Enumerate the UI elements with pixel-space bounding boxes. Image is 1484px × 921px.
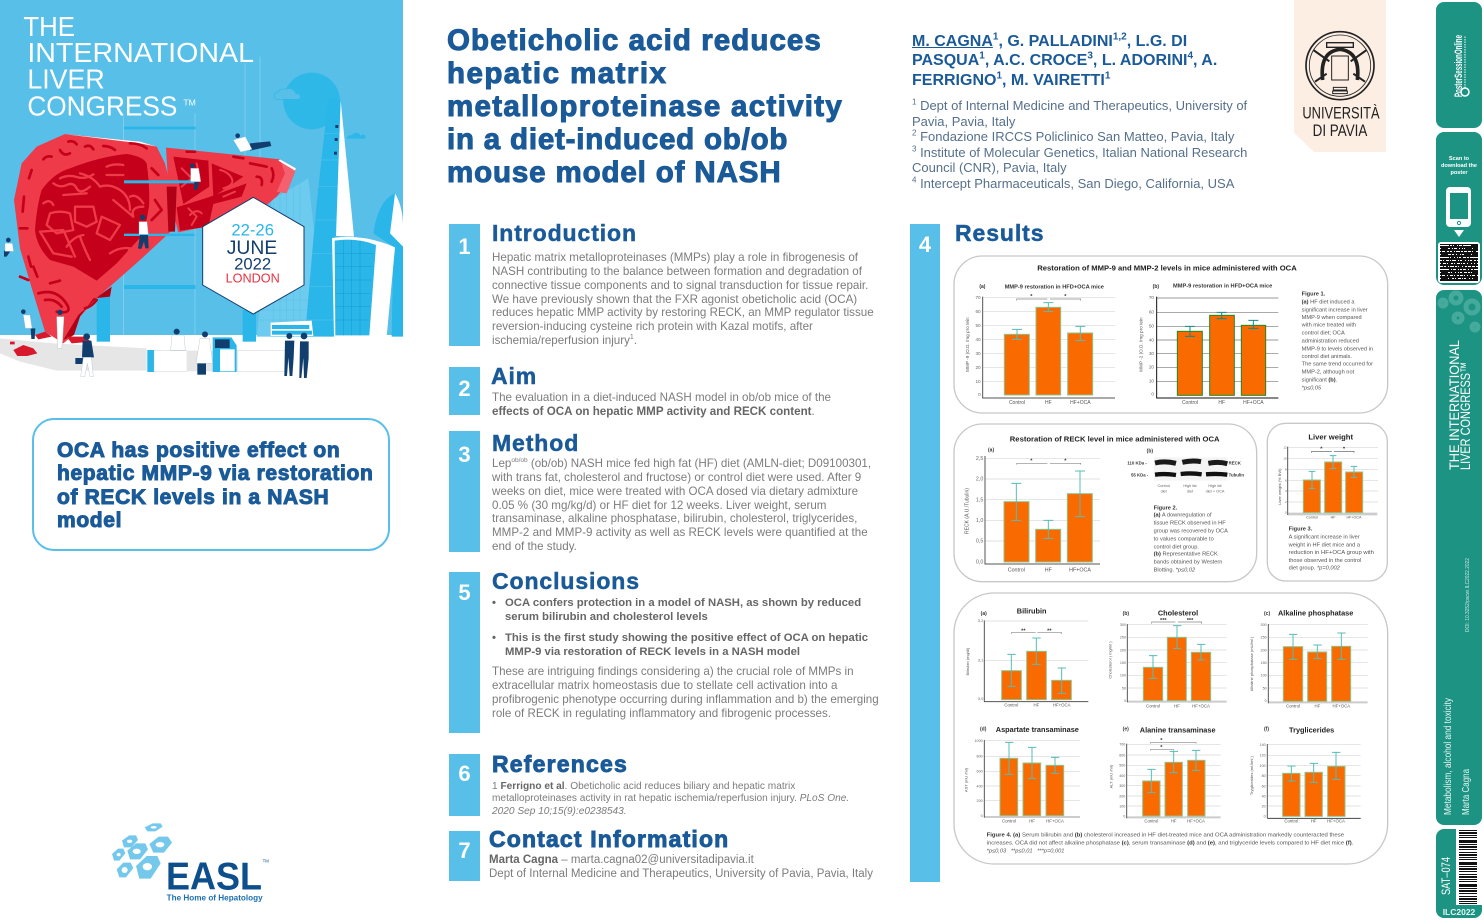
chart: MMP-2 bars: 10 — [1149, 379, 1154, 384]
chart: RECK bars: HF — [1045, 568, 1053, 574]
chart: RECK bars: 1,0 — [976, 518, 983, 524]
chart: triglycerides: 100 — [1260, 764, 1266, 768]
text: contact: Marta Cagna – marta.cagna02@universitadipavia.it Dept of Internal Medicine and Therapeutics, University of Pavia, Pavia, Italy — [489, 854, 873, 880]
chart: liver weight bars: 2 — [1285, 500, 1287, 504]
congress name: LIVER — [27, 64, 105, 95]
chart: liver weight bars: 8 — [1285, 468, 1287, 472]
section number 2: 2 — [458, 376, 471, 401]
chart: RECK bars: 1,5 — [976, 497, 983, 503]
text: method: Lepob/ob (ob/ob) NASH mice fed high fat (HF) diet (AMLN-diet; D09100301, with trans fat, cholesterol and fructose) or control diet were used. After 9 weeks on diet, mice were treated with OCA dosed via dietary admixture 0.05 % (30 mg/kg/d) or HF diet for 12 weeks. Liver weight, serum transaminase, alkaline phosphatase, bilirubin, cholesterol, triglycerides, MMP-2 and MMP-9 activity as well as RECK levels were quantified at the end of the study. — [492, 457, 871, 553]
chart: liver weight bars: 6 — [1285, 478, 1287, 482]
caption: figure 1: (a) HF diet induced a — [1302, 300, 1355, 306]
chart: MMP-9 bars: (a) — [979, 284, 986, 290]
sidebar block: scan to download poster — [1436, 132, 1482, 285]
chart: bilirubin: HF+OCA — [1053, 703, 1071, 708]
panel: congress banner illustration — [0, 0, 403, 378]
chart: MMP-2 bars: 30 — [1149, 351, 1154, 356]
text: reference: 1 Ferrigno et al. Obeticholic acid reduces biliary and hepatic matrix metalloproteinases activity in rat hepatic ischemia/reperfusion injury. PLoS One. 2020 Sep 10;15(9):e0238543. — [492, 781, 849, 817]
image: Western blot: High fat — [1183, 484, 1198, 488]
chart: MMP-2 bars: 0 — [1151, 392, 1154, 397]
chart: cholesterol: *** — [1160, 618, 1167, 624]
chart: triglycerides: Tryglicerides — [1289, 726, 1334, 735]
caption: figure 1: administration reduced — [1302, 338, 1359, 344]
sidebar block: poster number and barcode: ILC2022 — [1443, 907, 1476, 917]
chart: MMP-9 bars: MMP-9 restoration in HFD+OCA mice — [1005, 285, 1104, 291]
chart: alkaline phosphatase: 150 — [1261, 661, 1267, 665]
chart: triglycerides: 40 — [1262, 794, 1266, 798]
chart: MMP-9 bars: 70 — [975, 295, 981, 300]
caption: figure 3 — [1288, 527, 1374, 572]
caption: figure 1: significant (b). — [1302, 377, 1338, 383]
chart: alkaline phosphatase: 200 — [1261, 648, 1267, 652]
chart: alkaline phosphatase: Control — [1286, 704, 1300, 709]
chart: MMP-2 bars: MMP-9 restoration in HFD+OCA mice — [1173, 283, 1272, 289]
congress name: THE — [23, 11, 75, 42]
chart: alkaline phosphatase: 100 — [1261, 674, 1267, 678]
chart: aspartate transaminase: 200 — [977, 799, 983, 803]
affiliations: 1 Dept of Internal Medicine and Therapeutics, University of Pavia, Pavia, Italy 2 Fondazione IRCCS Policlinico San Matteo, Pavia, Italy 3 Institute of Molecular Genetics, Italian National Research Council (CNR), Pavia, Italy 4 Intercept Pharmaceuticals, San Diego, California, USA — [912, 98, 1247, 191]
chart: triglycerides: 60 — [1262, 784, 1266, 788]
chart: RECK bars: * — [1030, 459, 1033, 465]
date hexagon: JUNE — [227, 238, 277, 259]
chart: bilirubin: Control — [1004, 703, 1018, 708]
chart: triglycerides: 80 — [1262, 774, 1266, 778]
section number 1 — [449, 224, 480, 346]
chart: RECK bars — [964, 448, 1100, 574]
sidebar block: scan to download poster: Scan to — [1449, 156, 1470, 162]
chart: triglycerides — [1249, 726, 1361, 824]
section number 4: 4 — [919, 232, 931, 257]
panel: serum biochemistry — [953, 592, 1388, 865]
image: Western blot: (b) — [1147, 449, 1153, 455]
authors: M. CAGNA1, G. PALLADINI1,2, L.G. DI PASQUA1, A.C. CROCE3, L. ADORINI4, A. FERRIGNO1, M. VAIRETTI1 — [912, 32, 1217, 89]
chart: RECK bars: * — [1064, 459, 1067, 465]
chart: cholesterol: Cholesterol — [1158, 609, 1198, 618]
caption: figure 2: group was recovered by OCA — [1154, 529, 1228, 535]
chart: aspartate transaminase: HF — [1029, 819, 1035, 824]
sidebar block: scan to download poster: poster — [1450, 170, 1468, 176]
chart: bilirubin: HF — [1033, 703, 1040, 708]
heading: Contact Information: Contact Information — [489, 826, 729, 852]
heading: Aim: Aim — [491, 363, 537, 389]
text: conclusions bullets: This is the first study showing the positive effect of OCA on hepatic MMP-9 via restoration of RECK levels in a NASH model — [505, 632, 868, 658]
text: aim: The evaluation in a diet-induced NASH model in ob/ob mice of the effects of OCA on hepatic MMP activity and RECK content. — [492, 391, 831, 418]
congress name: TM — [183, 97, 196, 107]
caption: figure 1: significant increase in liver — [1302, 307, 1368, 313]
caption: figure 4 — [987, 833, 1354, 855]
chart: liver weight bars: HF+OCA — [1347, 516, 1362, 520]
chart: alanine transaminase: 600 — [1119, 753, 1125, 757]
chart: MMP-9 bars: MMP -9 (O.D. /mg pro tein — [965, 317, 970, 372]
section number 4 — [910, 224, 940, 882]
heading: Conclusions: Conclusions — [492, 568, 640, 594]
sidebar block: congress and session: THE INTERNATIONAL — [1446, 340, 1462, 470]
chart: cholesterol: (b) — [1123, 611, 1129, 617]
chart: bilirubin: 3,2 — [978, 618, 984, 623]
chart: cholesterol: 100 — [1120, 674, 1126, 678]
chart: alanine transaminase: Control — [1144, 819, 1158, 824]
chart: triglycerides: Tryglicerides (mU/ml ) — [1249, 756, 1254, 795]
chart: cholesterol: Cholesterol ( mg/ml ) — [1107, 641, 1112, 679]
chart: aspartate transaminase: Aspartate transaminase — [996, 725, 1079, 734]
sidebar block: congress and session: LIVER CONGRESS™ — [1457, 362, 1473, 470]
date hexagon: 2022 — [234, 254, 271, 273]
chart: triglycerides: HF+OCA — [1327, 819, 1345, 824]
chart: alkaline phosphatase: 250 — [1261, 636, 1267, 640]
caption: figure 2: (a) A downregulation of — [1154, 513, 1212, 519]
icon: London skyline — [97, 73, 403, 342]
chart: alanine transaminase: 500 — [1119, 764, 1125, 768]
caption: figure 2: (b) Representative RECK — [1154, 552, 1218, 558]
chart: MMP-9 bars: 10 — [975, 379, 981, 384]
caption: figure 1: MMP-9 when compared — [1302, 315, 1362, 321]
chart: MMP-9 bars: 20 — [975, 365, 981, 370]
panel: RECK restoration: Restoration of RECK level in mice administered with OCA — [1010, 435, 1220, 444]
image: Western blot: Control — [1157, 484, 1170, 488]
panel: MMP restoration — [953, 255, 1388, 414]
panel: liver weight: Liver weight — [1308, 433, 1353, 442]
text: conclusions bullets: OCA confers protection in a model of NASH, as shown by reduced serum bilirubin and cholesterol levels — [505, 597, 861, 623]
chart: alanine transaminase: * — [1160, 745, 1163, 751]
chart: alanine transaminase: Alanine transaminase — [1140, 726, 1216, 735]
chart: bilirubin: Bilirubin — [1017, 607, 1047, 616]
caption: figure 3: reduction in HF+OCA group with — [1289, 550, 1374, 556]
logo: Università di Pavia — [1294, 0, 1386, 152]
caption: figure 1: MMP-2, although not — [1302, 370, 1355, 376]
caption: figure 3: A significant increase in liver — [1289, 535, 1360, 541]
chart: cholesterol: 50 — [1122, 686, 1126, 690]
icon: lab bench and scientists — [4, 133, 309, 378]
chart: MMP-9 bars: HF+OCA — [1070, 400, 1091, 406]
chart: cholesterol: 150 — [1120, 661, 1126, 665]
chart: MMP-2 bars: (b) — [1153, 284, 1159, 290]
icon: EASL logo: The Home of Hepatology — [167, 894, 263, 903]
sidebar block: congress and session: DOI: 10.3252/pscwi.ILC2022.2022 — [1465, 558, 1471, 632]
chart: aspartate transaminase — [963, 725, 1080, 824]
chart: alkaline phosphatase: 50 — [1263, 686, 1267, 690]
chart: MMP-2 bars — [1138, 283, 1278, 406]
caption: figure 2: tissue RECK observed in HF — [1154, 521, 1226, 527]
caption: figure 2 — [1154, 506, 1228, 574]
chart: aspartate transaminase: Control — [1002, 819, 1016, 824]
sidebar block: scan to download poster: download the — [1441, 163, 1477, 169]
chart: alanine transaminase: HF+OCA — [1187, 819, 1205, 824]
chart: liver weight bars: Control — [1306, 516, 1318, 520]
image: Western blot: 110 KDa - — [1127, 461, 1147, 466]
chart: MMP-2 bars: Control — [1182, 400, 1198, 406]
chart: aspartate transaminase: 800 — [977, 755, 983, 759]
chart: cholesterol: 200 — [1120, 648, 1126, 652]
chart: triglycerides: 0 — [1264, 815, 1266, 819]
image: Western blot: Tubulin — [1229, 472, 1244, 477]
caption: figure 1: control diet; OCA — [1302, 331, 1345, 337]
caption: figure 3: those observed in the control — [1289, 558, 1361, 564]
heading: Results: Results — [955, 220, 1044, 246]
text: conclusions bullets — [492, 597, 868, 658]
caption: figure 1: control diet animals. — [1302, 354, 1352, 360]
chart: alkaline phosphatase: (c) — [1264, 611, 1270, 617]
chart: MMP-9 bars: 0 — [978, 392, 981, 397]
text: introduction: Hepatic matrix metalloproteinases (MMPs) play a role in fibrogenesis of NASH contributing to the balance between formation and degradation of connective tissue components and to signal transduction for tissue repair. We have previously shown that the FXR agonist obeticholic acid (OCA) reduces hepatic MMP activity by restoring RECK, an MMP regulator tissue reversion-inducing cysteine rich protein with Kazal motifs, after ischemia/reperfusion injury1. — [492, 251, 874, 347]
chart: bilirubin: ** — [1021, 628, 1026, 634]
chart: RECK bars: 0,0 — [976, 559, 983, 565]
caption: figure 1: Figure 1. — [1302, 292, 1326, 298]
chart: cholesterol: 250 — [1120, 636, 1126, 640]
section number 1: 1 — [458, 234, 471, 259]
chart: RECK bars: (a) — [988, 448, 994, 454]
icon: liver — [10, 134, 296, 356]
caption: figure 4: Figure 4. (a) Serum bilirubin and (b) cholesterol increased in HF diet-treated mice and OCA administration markedly counteracted these — [987, 833, 1344, 839]
chart: RECK bars: Control — [1008, 568, 1025, 574]
chart: alkaline phosphatase: Alkaline phosphatase (mU/ml ) — [1249, 636, 1254, 691]
chart: alkaline phosphatase: 300 — [1261, 623, 1267, 627]
heading: References: References — [492, 751, 628, 777]
chart: aspartate transaminase: 1000 — [975, 739, 983, 743]
panel: sidebar — [1436, 2, 1482, 918]
section number 5 — [449, 572, 480, 733]
date hexagon: 22-26 — [231, 220, 274, 239]
chart: liver weight bars: HF — [1331, 516, 1336, 520]
chart: liver weight bars: * — [1343, 447, 1346, 453]
icon: EASL logo — [112, 823, 269, 903]
chart: MMP-2 bars: MMP -2 (O.D. /mg pro tein — [1138, 317, 1143, 372]
chart: alanine transaminase: 100 — [1119, 804, 1125, 808]
text: conclusions bullets: • — [492, 632, 496, 644]
chart: alanine transaminase: (e) — [1123, 727, 1129, 733]
chart: liver weight bars: 12 — [1283, 445, 1287, 449]
chart: bilirubin: 3,1 — [978, 658, 984, 663]
caption: figure 1: with mice treated with — [1301, 323, 1356, 329]
sidebar block: poster number and barcode — [1436, 829, 1482, 918]
panel: MMP restoration: Restoration of MMP-9 and MMP-2 levels in mice administered with OCA — [1037, 264, 1297, 273]
chart: liver weight bars — [1277, 445, 1378, 520]
chart: liver weight bars: * — [1320, 447, 1323, 453]
chart: MMP-9 bars: 50 — [975, 323, 981, 328]
chart: RECK bars: 2,0 — [976, 477, 983, 483]
congress name: INTERNATIONAL — [27, 37, 254, 68]
logo: Università di Pavia: UNIVERSITÀ — [1302, 104, 1380, 123]
chart: alkaline phosphatase: Alkaline phosphatase — [1278, 609, 1353, 618]
section number 3 — [449, 431, 480, 552]
chart: cholesterol: 0 — [1124, 699, 1126, 703]
chart: aspartate transaminase: (d) — [980, 727, 987, 733]
chart: triglycerides: 120 — [1260, 754, 1266, 758]
congress name: CONGRESS — [27, 90, 177, 121]
chart: RECK bars: 2,5 — [976, 456, 983, 462]
sidebar block: Poster Session Online — [1436, 2, 1482, 128]
chart: alanine transaminase: 200 — [1119, 794, 1125, 798]
logo: Università di Pavia: DI PAVIA — [1313, 121, 1368, 140]
panel: RECK restoration — [953, 423, 1258, 582]
chart: alanine transaminase: 400 — [1119, 774, 1125, 778]
chart: alkaline phosphatase: 0 — [1265, 699, 1267, 703]
heading: Introduction: Introduction — [492, 220, 637, 246]
chart: MMP-9 bars: * — [1030, 294, 1033, 300]
chart: alkaline phosphatase: HF — [1314, 704, 1321, 709]
chart: cholesterol: 300 — [1120, 623, 1126, 627]
chart: alanine transaminase: 300 — [1119, 784, 1125, 788]
chart: bilirubin: 3,0 — [978, 696, 984, 701]
image: Western blot: diet + OCA — [1206, 490, 1225, 494]
sidebar block: congress and session: Metabolism, alcohol and toxicity — [1442, 697, 1454, 815]
chart: triglycerides: HF — [1311, 819, 1317, 824]
chart: liver weight bars: 0 — [1285, 511, 1287, 515]
section number 5: 5 — [458, 580, 471, 605]
title: Obeticholic acid reduces hepatic matrix metalloproteinase activity in a diet-induced ob/ob mouse model of NASH — [447, 24, 843, 189]
sidebar block: congress and session: Marta Cagna — [1460, 769, 1472, 815]
section number 3: 3 — [458, 442, 471, 467]
date hexagon: LONDON — [226, 272, 280, 286]
caption: figure 2: to values comparable to — [1154, 537, 1214, 543]
chart: cholesterol: Control — [1146, 704, 1160, 709]
chart: MMP-2 bars: 40 — [1149, 337, 1154, 342]
image: Western blot: High fat — [1208, 484, 1223, 488]
chart: RECK bars: RECK (A.U./Tubulin) — [964, 488, 970, 534]
icon: EASL logo: TM — [263, 859, 269, 864]
section number 6 — [449, 754, 480, 816]
chart: aspartate transaminase: HF+OCA — [1046, 819, 1064, 824]
text: conclusions paragraph: These are intriguing findings considering a) the crucial role of MMPs in extracellular matrix homeostasis due to stellate cell activation into a profibrogenic phenotype occurring during inflammation and b) the emerging role of RECK in regulating inflammatory and fibrogenic processes. — [492, 665, 879, 720]
chart: cholesterol: *** — [1187, 618, 1194, 624]
chart: triglycerides: Control — [1284, 819, 1298, 824]
chart: alanine transaminase — [1109, 726, 1221, 824]
callout: key message: OCA has positive effect on hepatic MMP-9 via restoration of RECK levels in a NASH model — [57, 439, 373, 532]
image: Western blot: 55 KDa - — [1131, 472, 1149, 477]
chart: alkaline phosphatase — [1249, 609, 1368, 709]
caption: figure 2: control diet group. — [1154, 545, 1199, 551]
caption: figure 2: Blotting. *p≤0,02 — [1154, 568, 1196, 574]
caption: figure 1: The same trend occurred for — [1302, 362, 1373, 368]
chart: MMP-2 bars: 20 — [1149, 365, 1154, 370]
caption: figure 2: Figure 2. — [1154, 506, 1178, 512]
chart: aspartate transaminase: 600 — [977, 770, 983, 774]
panel: liver weight — [1266, 422, 1388, 582]
chart: alanine transaminase: ALT (mU /ml) — [1109, 764, 1114, 788]
chart: MMP-9 bars: * — [1064, 294, 1067, 300]
chart: alanine transaminase: * — [1160, 738, 1163, 744]
chart: MMP-2 bars: 50 — [1149, 323, 1154, 328]
caption: figure 3: diet group. *p=0,002 — [1289, 566, 1341, 572]
caption: figure 4: *p≤0,03 **p≤0,01 ***p=0,001 — [987, 849, 1064, 855]
chart: alanine transaminase: 700 — [1119, 743, 1125, 747]
chart: cholesterol — [1107, 609, 1227, 709]
caption: figure 3: Figure 3. — [1289, 527, 1313, 533]
chart: MMP-9 bars: 60 — [975, 309, 981, 314]
chart: bilirubin: Bilirubin (mg/dl) — [965, 647, 970, 676]
chart: MMP-9 bars: 30 — [975, 351, 981, 356]
icon: phone — [1446, 187, 1471, 237]
caption: figure 3: weight in HF diet mice and a — [1288, 542, 1361, 548]
chart: aspartate transaminase: 0 — [981, 814, 983, 818]
icon: QR code — [1438, 242, 1480, 283]
chart: MMP-2 bars: HF — [1218, 400, 1225, 406]
heading: Method: Method — [492, 430, 579, 456]
chart: MMP-2 bars: 70 — [1149, 295, 1154, 300]
chart: RECK bars: HF+OCA — [1069, 568, 1091, 574]
section number 2 — [449, 367, 480, 415]
chart: liver weight bars: 10 — [1283, 457, 1287, 461]
date hexagon — [203, 197, 304, 314]
chart: MMP-2 bars: HF+OCA — [1243, 400, 1264, 406]
congress name — [23, 11, 254, 121]
chart: aspartate transaminase: AST (mU /ml) — [963, 767, 968, 792]
text: conclusions bullets: • — [492, 597, 496, 609]
chart: MMP-9 bars: Control — [1009, 400, 1025, 406]
chart: alanine transaminase: 0 — [1123, 814, 1125, 818]
section number 7 — [449, 831, 480, 881]
chart: aspartate transaminase: 400 — [977, 784, 983, 788]
sidebar block: poster number and barcode: SAT–074 — [1439, 857, 1453, 895]
sidebar block: congress and session — [1436, 290, 1482, 825]
chart: cholesterol: HF — [1174, 704, 1180, 709]
caption: figure 1 — [1301, 292, 1373, 391]
chart: bilirubin: ** — [1047, 628, 1052, 634]
caption: figure 2: bands obtained by Western — [1154, 560, 1222, 566]
chart: triglycerides: 140 — [1260, 743, 1266, 747]
image: Western blot — [1127, 449, 1244, 494]
chart: MMP-9 bars: HF — [1045, 400, 1052, 406]
chart: alanine transaminase: HF — [1171, 819, 1177, 824]
chart: triglycerides: 20 — [1262, 804, 1266, 808]
caption: figure 1: MMP-9 to levels observed in — [1302, 346, 1373, 352]
image: Western blot: diet — [1161, 490, 1168, 494]
chart: MMP-9 bars: 40 — [975, 337, 981, 342]
chart: liver weight bars: Liver weight (% BW) — [1277, 468, 1282, 505]
chart: bilirubin — [965, 607, 1088, 708]
chart: bilirubin: (a) — [981, 611, 987, 617]
chart: alkaline phosphatase: HF+OCA — [1332, 704, 1350, 709]
section number 7: 7 — [458, 838, 471, 863]
chart: cholesterol: HF+OCA — [1192, 704, 1210, 709]
section number 6: 6 — [458, 761, 471, 786]
caption: figure 4: increases. OCA did not affect alkaline phosphatase (c), serum transaminase (d) and (e), and triglyceride levels compared to HF diet mice (f). — [987, 841, 1354, 847]
chart: RECK bars: 0,5 — [976, 539, 983, 545]
image: Western blot: diet — [1187, 490, 1194, 494]
chart: MMP-2 bars: 60 — [1149, 309, 1154, 314]
chart: MMP-9 bars — [965, 284, 1115, 406]
caption: figure 1: *p≤0,05 — [1302, 385, 1322, 391]
callout: key message — [32, 418, 390, 551]
image: Western blot: RECK — [1229, 461, 1242, 466]
icon: EASL logo: EASL — [166, 854, 262, 898]
chart: triglycerides: (f) — [1264, 727, 1269, 733]
chart: liver weight bars: 4 — [1285, 489, 1287, 493]
